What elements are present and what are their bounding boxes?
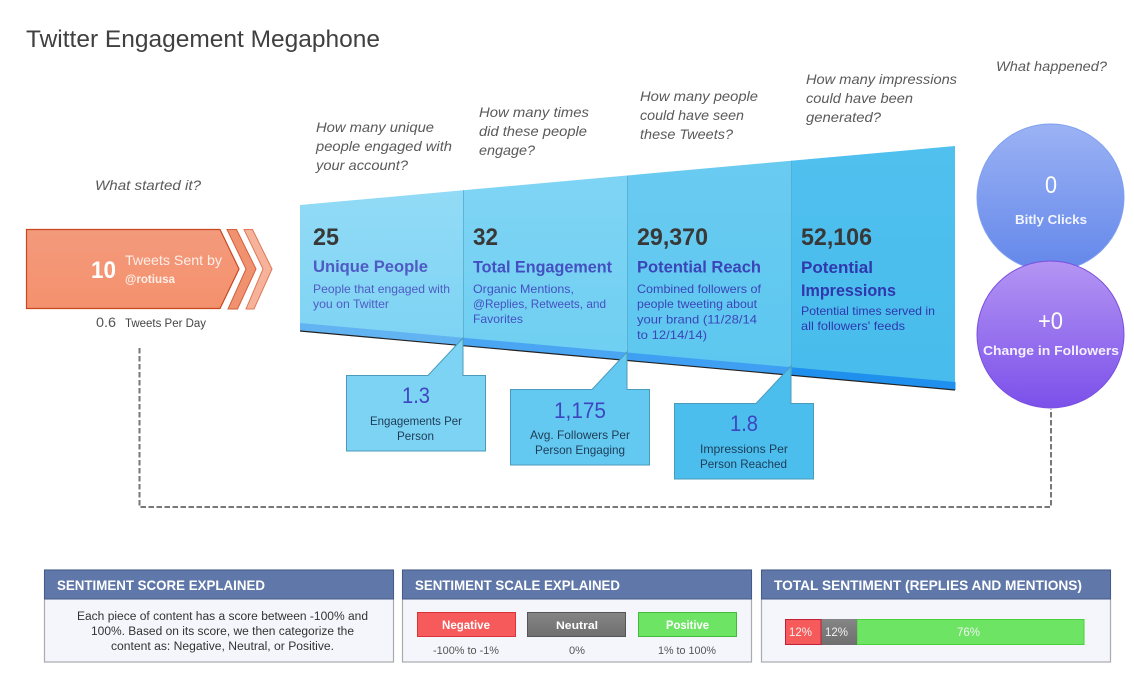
segment: potential impressions: all followers' feeds	[801, 319, 905, 333]
segment: total engagement	[463, 176, 627, 360]
question: engagement: How many times	[479, 104, 589, 120]
question: reach: How many people	[640, 88, 758, 104]
segment: total engagement: Organic Mentions,	[473, 282, 574, 296]
chevron 1	[227, 230, 256, 309]
stacked sentiment bar: 12%	[825, 625, 848, 639]
segment: unique people: 25	[313, 224, 339, 251]
callout: engagements per person: Person	[397, 429, 434, 443]
segment: potential impressions: Potential times served in	[801, 304, 935, 318]
panel header	[44, 570, 394, 599]
positive key	[638, 612, 736, 657]
circle: change in followers	[977, 261, 1124, 408]
question: engagement	[479, 104, 589, 158]
segment: potential reach: 29,370	[637, 224, 708, 251]
tweets per day: Tweets Per Day	[125, 318, 206, 330]
tweets per day	[96, 314, 206, 330]
question: impressions: generated?	[806, 109, 881, 125]
positive key: Positive	[666, 618, 709, 632]
circle: bitly clicks	[977, 124, 1124, 271]
account handle: @rotiusa	[125, 274, 176, 286]
question: reach: could have seen	[640, 107, 744, 123]
tweets label: Tweets Sent by	[125, 252, 222, 268]
segment: potential impressions	[791, 146, 956, 390]
negative key: Negative	[442, 618, 490, 632]
question: unique people	[315, 119, 452, 173]
neutral key: Neutral	[556, 620, 598, 632]
callout: impressions per person: 1.8	[730, 411, 758, 436]
stacked sentiment bar: 76%	[957, 625, 980, 639]
segment: unique people: you on Twitter	[313, 297, 389, 311]
question: impressions: How many impressions	[806, 71, 957, 87]
callout: impressions per person: Person Reached	[700, 457, 787, 471]
circle: change in followers: +0	[1038, 308, 1063, 335]
negative key	[418, 612, 516, 657]
segment: unique people: Unique People	[313, 257, 428, 276]
title: Twitter Engagement Megaphone	[26, 26, 380, 53]
segment: unique people: People that engaged with	[313, 282, 450, 296]
panel body text: 100%. Based on its score, we then categorize the	[91, 626, 354, 638]
panel: total sentiment: TOTAL SENTIMENT (REPLIES AND MENTIONS)	[774, 577, 1082, 593]
circle: bitly clicks: Bitly Clicks	[1015, 212, 1087, 227]
panel: sentiment score explained	[44, 570, 394, 662]
segment: potential reach	[627, 161, 791, 375]
panel body text	[77, 611, 368, 653]
segment: total engagement: Favorites	[473, 312, 523, 326]
callout: engagements per person: 1.3	[402, 383, 430, 408]
segment: total engagement: 32	[473, 224, 498, 251]
neutral key: 0%	[569, 645, 585, 657]
segment: potential reach: Combined followers of	[637, 282, 762, 296]
panel: sentiment scale explained	[402, 570, 752, 662]
question: unique people: your account?	[315, 157, 408, 173]
tweets per day: 0.6	[96, 314, 116, 330]
panel: sentiment scale explained: SENTIMENT SCALE EXPLAINED	[415, 577, 620, 593]
stacked sentiment bar: 12%	[789, 625, 812, 639]
segment: total engagement: Total Engagement	[473, 258, 612, 276]
question: engagement: engage?	[479, 142, 535, 158]
tweet count: 10	[91, 257, 116, 284]
question: impressions	[806, 71, 957, 125]
callout: impressions per person: Impressions Per	[700, 442, 788, 456]
segment: potential reach: to 12/14/14)	[637, 328, 707, 342]
neutral key	[528, 612, 626, 657]
panel: sentiment score explained: SENTIMENT SCORE EXPLAINED	[57, 577, 265, 593]
question: reach: these Tweets?	[640, 126, 733, 142]
callout: engagements per person	[346, 338, 486, 451]
panel body text: content as: Negative, Neutral, or Positive.	[111, 641, 334, 653]
segment: unique people	[300, 190, 463, 346]
question: impressions: could have been	[806, 90, 913, 106]
question: reach	[640, 88, 758, 142]
question: engagement: did these people	[479, 123, 587, 139]
circle: change in followers: Change in Followers	[983, 343, 1119, 358]
arrow body	[26, 230, 239, 308]
dashed connector	[140, 348, 1051, 507]
circle: bitly clicks: 0	[1045, 172, 1057, 199]
panel: total sentiment	[762, 570, 1110, 662]
panel header	[402, 570, 752, 599]
segment: potential impressions: Potential	[801, 258, 873, 277]
chevron 2	[244, 230, 272, 309]
panel header	[762, 570, 1110, 599]
segment: potential reach: Potential Reach	[637, 258, 761, 276]
question: what started it: What started it?	[95, 177, 201, 193]
tweets sent arrow	[26, 230, 272, 309]
callout: average followers per person	[510, 352, 650, 465]
segment: potential reach: your brand (11/28/14	[637, 312, 757, 326]
segment: total engagement: @Replies, Retweets, and	[473, 297, 606, 311]
segment: potential reach: people tweeting about	[637, 297, 758, 311]
funnel	[300, 146, 956, 390]
question: unique people: people engaged with	[315, 138, 452, 154]
callout: average followers per person: Person Engaging	[535, 443, 625, 457]
callout: average followers per person: Avg. Followers Per	[530, 428, 630, 442]
segment: potential impressions: Impressions	[801, 281, 896, 300]
positive key: 1% to 100%	[658, 645, 716, 657]
segment: potential impressions: 52,106	[801, 224, 872, 251]
stacked sentiment bar	[786, 619, 1084, 645]
negative key: -100% to -1%	[433, 645, 499, 657]
callout: engagements per person: Engagements Per	[370, 414, 462, 428]
callout: average followers per person: 1,175	[554, 398, 606, 423]
question: what happened: What happened?	[996, 58, 1107, 74]
callout: impressions per person	[674, 366, 814, 479]
panel body text: Each piece of content has a score between -100% and	[77, 611, 368, 623]
question: unique people: How many unique	[316, 119, 434, 135]
